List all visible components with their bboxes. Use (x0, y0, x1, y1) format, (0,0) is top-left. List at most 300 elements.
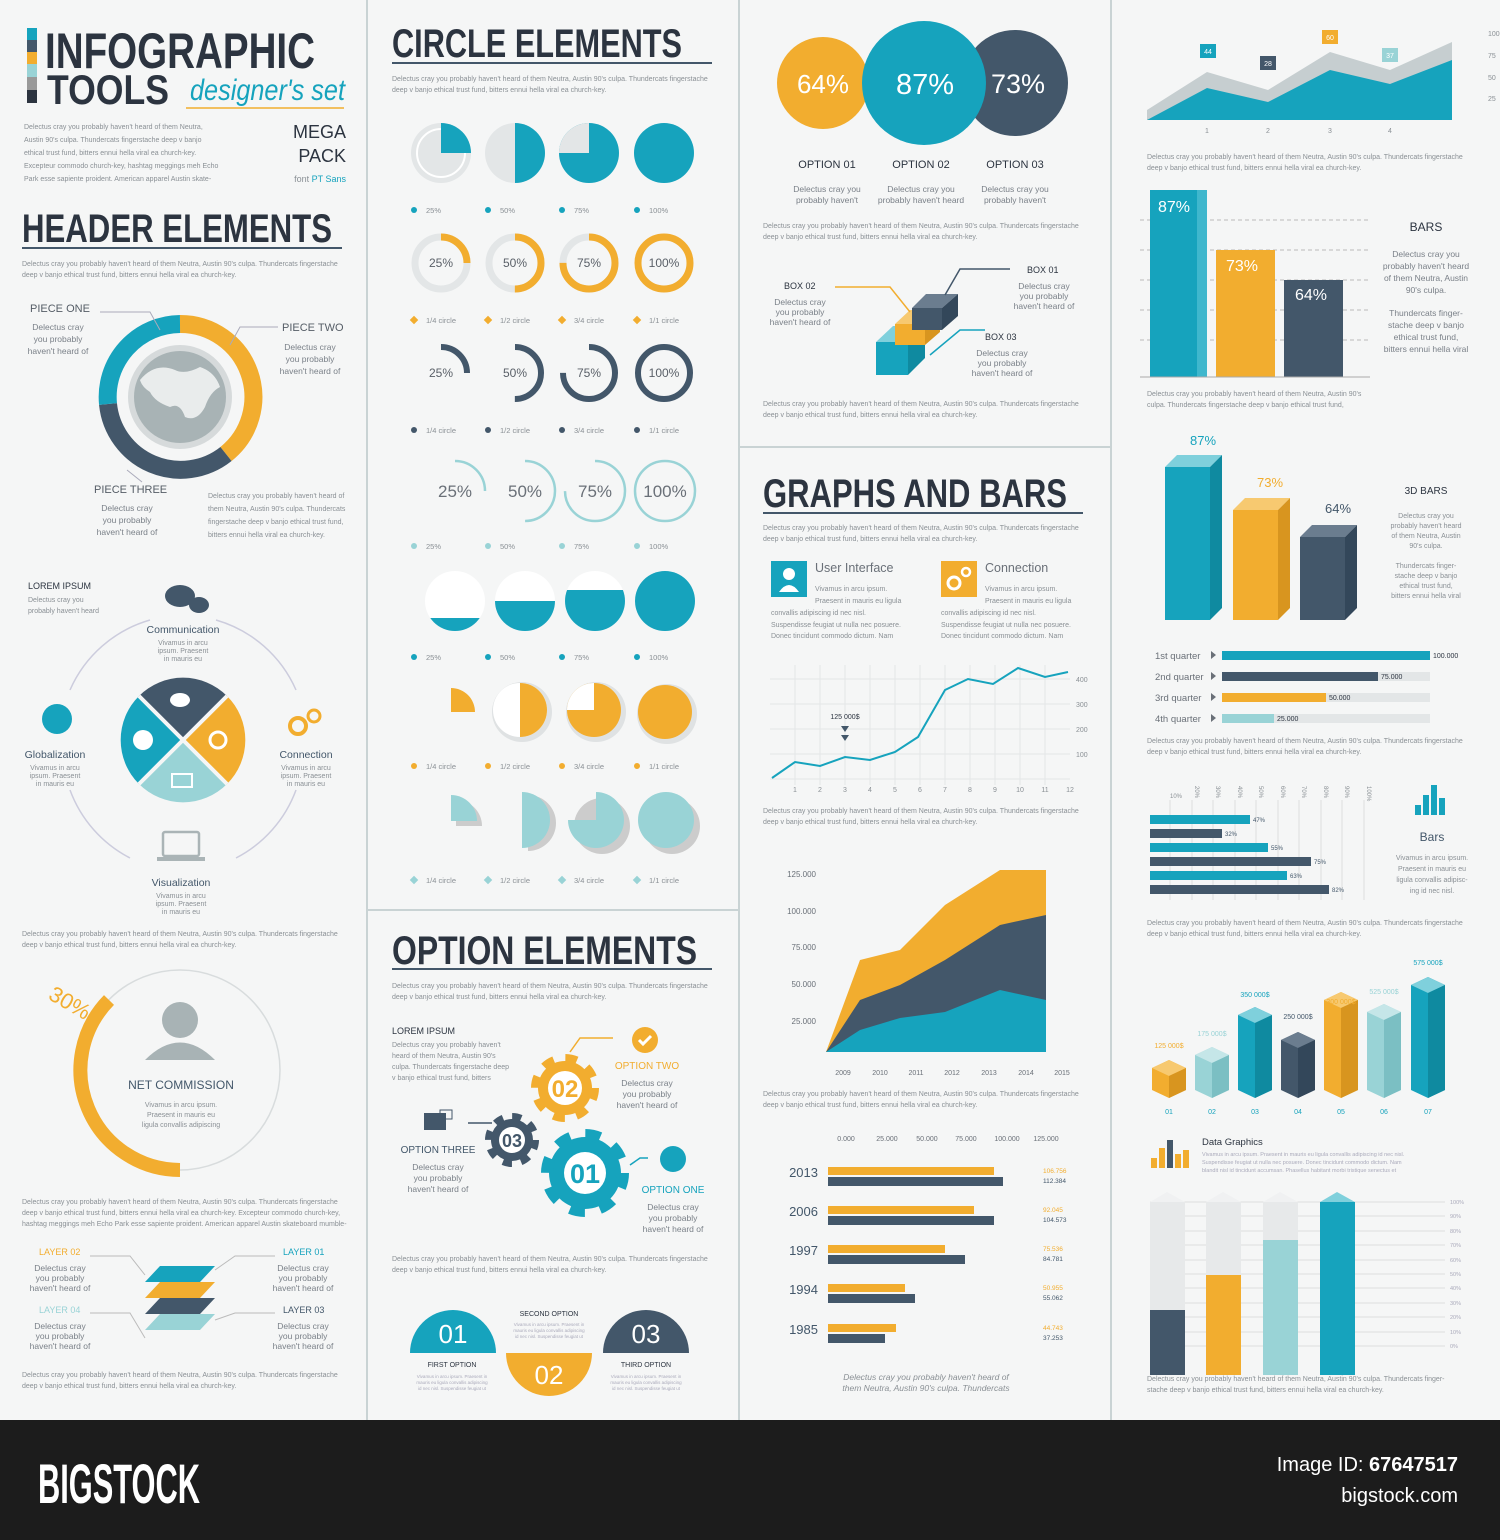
3d bars: 90's culpa. (1409, 543, 1443, 550)
area chart: Delectus cray you probably haven't heard of them Neutra, Austin 90's culpa. Thundercats fingerstache (763, 1091, 1079, 1098)
donut with globe: fingerstache deep v banjo ethical trust fund, (208, 519, 343, 526)
legend row 3: 1/2 circle (500, 426, 530, 435)
3d columns chart: 07 (1424, 1109, 1432, 1116)
bar chart: stache deep v banjo (1388, 320, 1464, 330)
three overlapping circles: Delectus cray you probably haven't heard of them Neutra, Austin 90's culpa. Thundercats fingerstache (763, 223, 1079, 230)
3d boxes: BOX 02 (784, 281, 816, 291)
3d bars: 87% (1190, 433, 1216, 448)
top right area chart: 4 (1388, 128, 1392, 135)
quad circle diagram: Delectus cray you probably haven't heard of them Neutra, Austin 90's culpa. Thundercats fingerstache (22, 931, 338, 938)
donut with globe: bitters ennui hella viral ea church-key. (208, 532, 325, 539)
donut with globe: Delectus cray (32, 322, 84, 332)
quarter progress bars: 4th quarter (1155, 714, 1201, 725)
heading: circle elements (392, 22, 712, 94)
bar chart: culpa. Thundercats fingerstache deep v banjo ethical trust fund, (1147, 402, 1344, 409)
data graphics columns: Delectus cray you probably haven't heard of them Neutra, Austin 90's culpa. Thundercats finger- (1147, 1376, 1445, 1383)
3d bars: Delectus cray you (1398, 513, 1454, 520)
area chart: 2013 (981, 1070, 997, 1077)
area chart: 2010 (872, 1070, 888, 1077)
line chart: 6 (918, 787, 922, 794)
layers: LAYER 01 (283, 1247, 324, 1257)
bar chart: probably haven't heard (1383, 261, 1469, 271)
quad circle diagram: Connection (279, 749, 333, 761)
percent bars: 55% (1271, 846, 1284, 852)
line chart: 1 (793, 787, 797, 794)
legend row 5: 100% (649, 653, 669, 662)
layers: you probably (36, 1331, 85, 1341)
3d columns chart: 250 000$ (1283, 1014, 1313, 1021)
donut with globe: Delectus cray (284, 342, 336, 352)
title block: designer's set (190, 74, 346, 107)
top right area chart: 50 (1488, 75, 1496, 82)
quarter progress bars: 3rd quarter (1155, 693, 1201, 704)
icon blocks: convallis adipiscing id nec nisl. (941, 610, 1036, 617)
top right area chart (1147, 30, 1500, 172)
horizontal year bars: 25.000 (876, 1136, 898, 1143)
3d boxes: Delectus cray (976, 348, 1028, 358)
circle row 2: orange rings: 75% (577, 256, 601, 270)
area chart: 125.000 (787, 870, 817, 879)
heading: header elements: deep v banjo ethical trust fund, bitters ennui hella viral ea church-key. (22, 272, 236, 279)
top right area chart: 3 (1328, 128, 1332, 135)
quad circle diagram: in mauris eu (164, 656, 202, 663)
data graphics columns: 30% (1450, 1301, 1461, 1307)
legend row 6: 1/1 circle (649, 762, 679, 771)
circle row 4: thin rings: 100% (643, 482, 687, 501)
three overlapping circles: Delectus cray you (887, 184, 955, 194)
icon blocks: Suspendisse feugiat ut nulla nec posuere. (941, 622, 1071, 629)
circle row 1: pies (411, 123, 694, 183)
legend row 7: 1/4 circle (426, 876, 456, 885)
title block: PACK (298, 146, 346, 166)
gears diagram: heard of them Neutra, Austin 90's (392, 1053, 496, 1060)
quad circle diagram: in mauris eu (36, 781, 74, 788)
quad circle diagram: Delectus cray you (28, 597, 84, 604)
3d columns chart: 125 000$ (1154, 1043, 1184, 1050)
line chart: 2 (818, 787, 822, 794)
title block: ethical trust fund, bitters ennui hella viral ea church-key. (24, 150, 196, 157)
semicircle options: Vivamus in arcu ipsum. Praesent in (611, 1374, 682, 1379)
heading: header elements: Delectus cray you probably haven't heard of them Neutra, Austin 90's culpa. Thundercats fingerstache (22, 261, 338, 268)
data graphics columns: 90% (1450, 1214, 1461, 1220)
icon blocks: Vivamus in arcu ipsum. (815, 586, 887, 593)
data graphics columns: stache deep v banjo ethical trust fund, bitters ennui hella viral ea church-key. (1147, 1387, 1384, 1394)
circle row 4: thin rings (425, 461, 695, 521)
percent bars: Vivamus in arcu ipsum. (1396, 855, 1468, 862)
line chart: 200 (1076, 727, 1088, 734)
bar chart: 73% (1226, 258, 1258, 275)
net commission: 30% (45, 981, 95, 1025)
semicircle options: THIRD OPTION (621, 1362, 671, 1369)
quarter progress bars: 100.000 (1433, 653, 1458, 660)
data graphics columns: 70% (1450, 1243, 1461, 1249)
area chart: 100.000 (787, 907, 817, 916)
quad circle diagram: Communication (147, 624, 220, 636)
donut with globe: haven't heard of (97, 527, 158, 537)
legend row 7 (410, 876, 679, 885)
gears diagram: OPTION TWO (615, 1061, 679, 1072)
percent bars: 40% (1236, 786, 1242, 799)
horizontal year bars: 0.000 (837, 1136, 855, 1143)
horizontal year bars: them Neutra, Austin 90's culpa. Thundercats (842, 1383, 1010, 1393)
percent bars: 70% (1300, 786, 1306, 799)
semicircle options: Vivamus in arcu ipsum. Praesent in (417, 1374, 488, 1379)
line chart: 400 (1076, 677, 1088, 684)
gears diagram: haven't heard of (643, 1224, 704, 1234)
3d boxes: haven't heard of (770, 317, 831, 327)
donut with globe: you probably (103, 515, 152, 525)
circle row 3: dark rings: 25% (429, 366, 453, 380)
line chart: 4 (868, 787, 872, 794)
semicircle options: SECOND OPTION (520, 1311, 578, 1318)
layers: haven't heard of (273, 1341, 334, 1351)
legend row 1 (411, 206, 669, 215)
icon blocks: Vivamus in arcu ipsum. (985, 586, 1057, 593)
bar chart: Thundercats finger- (1389, 308, 1463, 318)
circle row 3: dark rings: 100% (649, 366, 680, 380)
heading: option elements: OPTION ELEMENTS (392, 929, 697, 973)
layers: you probably (36, 1273, 85, 1283)
three overlapping circles: 73% (991, 69, 1045, 99)
circle row 2: orange rings: 50% (503, 256, 527, 270)
quad circle diagram: Globalization (25, 749, 86, 761)
area chart: 2014 (1018, 1070, 1034, 1077)
data graphics columns: 20% (1450, 1315, 1461, 1321)
3d boxes: haven't heard of (1014, 301, 1075, 311)
icon blocks: User Interface (815, 561, 894, 575)
horizontal year bars: 75.000 (955, 1136, 977, 1143)
gears diagram: Delectus cray you probably haven't (392, 1042, 501, 1049)
3d bars: probably haven't heard (1390, 523, 1462, 530)
3d boxes: you probably (978, 358, 1027, 368)
layers (22, 1247, 338, 1390)
quarter progress bars: 25.000 (1277, 716, 1299, 723)
3d boxes (763, 265, 1079, 419)
legend row 6: 3/4 circle (574, 762, 604, 771)
bar chart: ethical trust fund, (1394, 332, 1458, 342)
layers: Delectus cray (34, 1321, 86, 1331)
footer bar: BIGSTOCK (38, 1452, 200, 1515)
legend row 1: 75% (574, 206, 589, 215)
line chart: 10 (1016, 787, 1024, 794)
line chart (763, 665, 1088, 826)
horizontal year bars (789, 1136, 1067, 1393)
horizontal year bars: 2006 (789, 1204, 818, 1219)
data graphics columns: 40% (1450, 1286, 1461, 1292)
heading: option elements: Delectus cray you probably haven't heard of them Neutra, Austin 90's culpa. Thundercats fingerstache (392, 983, 708, 990)
legend row 6: 1/4 circle (426, 762, 456, 771)
legend row 4: 50% (500, 542, 515, 551)
quad circle diagram: ipsum. Praesent (158, 648, 208, 655)
area chart: 50.000 (792, 980, 817, 989)
horizontal year bars: 75.536 (1043, 1246, 1063, 1253)
circle row 4: thin rings: 75% (578, 482, 612, 501)
top right area chart: 1 (1205, 128, 1209, 135)
horizontal year bars: 50.955 (1043, 1285, 1063, 1292)
3d columns chart: 575 000$ (1413, 960, 1443, 967)
top right area chart: Delectus cray you probably haven't heard of them Neutra, Austin 90's culpa. Thundercats fingerstache (1147, 154, 1463, 161)
quarter progress bars (1147, 651, 1463, 756)
legend row 7: 3/4 circle (574, 876, 604, 885)
semicircle options: id nec nisl. Suspendisse feugiat ut (515, 1334, 584, 1339)
gears diagram: haven't heard of (408, 1184, 469, 1194)
top right area chart: 100 (1488, 31, 1500, 38)
title block (24, 23, 346, 184)
data graphics columns: 10% (1450, 1330, 1461, 1336)
icon blocks: Praesent in mauris eu ligula (985, 598, 1071, 605)
quad circle diagram: probably haven't heard (28, 608, 99, 615)
semicircle options: 01 (439, 1319, 467, 1349)
data graphics columns: 100% (1450, 1200, 1464, 1206)
top right area chart: 28 (1264, 61, 1272, 68)
layers: Delectus cray (277, 1321, 329, 1331)
layers: LAYER 03 (283, 1305, 324, 1315)
gears diagram: Delectus cray (621, 1078, 673, 1088)
quad circle diagram: deep v banjo ethical trust fund, bitters ennui hella viral ea church-key. (22, 942, 236, 949)
donut with globe (28, 303, 346, 539)
gear 01: 01 (570, 1159, 600, 1189)
heading: graphs and bars: GRAPHS AND BARS (763, 472, 1067, 516)
semicircle options: mauris eu ligula convallis adipiscing (610, 1380, 682, 1385)
circle row 2: orange rings: 100% (649, 256, 680, 270)
gears diagram: v banjo ethical trust fund, bitters (392, 1075, 491, 1082)
quad circle diagram: ipsum. Praesent (281, 773, 331, 780)
percent bars (1147, 785, 1468, 938)
area chart: 2009 (835, 1070, 851, 1077)
bar chart: 90's culpa. (1406, 285, 1446, 295)
legend row 5 (411, 653, 669, 662)
heading: circle elements: CIRCLE ELEMENTS (392, 22, 682, 66)
gears diagram: Delectus cray (647, 1202, 699, 1212)
gears diagram: Delectus cray (412, 1162, 464, 1172)
net commission (22, 970, 347, 1228)
heading: header elements: HEADER ELEMENTS (22, 207, 332, 251)
icon blocks (771, 561, 1071, 640)
three overlapping circles: Delectus cray you (793, 184, 861, 194)
heading: header elements (22, 207, 342, 279)
layers: Delectus cray you probably haven't heard of them Neutra, Austin 90's culpa. Thundercats fingerstache (22, 1372, 338, 1379)
legend row 7: 1/1 circle (649, 876, 679, 885)
area chart: 2012 (944, 1070, 960, 1077)
3d bars: Thundercats finger- (1396, 563, 1457, 570)
quarter progress bars: 2nd quarter (1155, 672, 1204, 683)
gears diagram: Delectus cray you probably haven't heard of them Neutra, Austin 90's culpa. Thundercats fingerstache (392, 1256, 708, 1263)
line chart: 9 (993, 787, 997, 794)
3d boxes: deep v banjo ethical trust fund, bitters ennui hella viral ea church-key. (763, 412, 977, 419)
horizontal year bars: 1985 (789, 1322, 818, 1337)
3d bars: of them Neutra, Austin (1391, 533, 1461, 540)
data graphics columns: Vivamus in arcu ipsum. Praesent in mauris eu ligula convallis adipiscing id nec nisl. (1202, 1152, 1405, 1158)
circle row 4: thin rings: 50% (508, 482, 542, 501)
semicircle options: mauris eu ligula convallis adipiscing (513, 1328, 585, 1333)
title block: Austin 90's culpa. Thundercats fingerstache deep v banjo (24, 137, 202, 144)
horizontal year bars: 1994 (789, 1282, 818, 1297)
top right area chart: 75 (1488, 53, 1496, 60)
data graphics columns: 50% (1450, 1272, 1461, 1278)
line chart: 100 (1076, 752, 1088, 759)
title block: Delectus cray you probably haven't heard of them Neutra, (24, 124, 203, 131)
legend row 6 (411, 762, 679, 771)
gears diagram: you probably (414, 1173, 463, 1183)
bar chart: Delectus cray you probably haven't heard of them Neutra, Austin 90's (1147, 391, 1362, 398)
gears diagram (392, 1026, 708, 1274)
legend row 3: 3/4 circle (574, 426, 604, 435)
quarter progress bars: 1st quarter (1155, 651, 1200, 662)
icon blocks: Donec tincidunt commodo dictum. Nam (771, 633, 893, 640)
legend row 2: 1/2 circle (500, 316, 530, 325)
percent bars: ligula convallis adipisc- (1396, 877, 1468, 884)
quad circle diagram: Vivamus in arcu (158, 640, 208, 647)
donut with globe: PIECE ONE (30, 303, 90, 315)
top right area chart: 44 (1204, 49, 1212, 56)
legend row 5: 25% (426, 653, 441, 662)
legend row 2: 1/1 circle (649, 316, 679, 325)
legend row 1: 25% (426, 206, 441, 215)
icon: colour bars (27, 28, 37, 103)
horizontal year bars: 1997 (789, 1243, 818, 1258)
semicircle options: id nec nisl. Suspendisse feugiat ut (418, 1386, 487, 1391)
circle row 2: orange rings (415, 237, 690, 289)
title block: MEGA (293, 122, 346, 142)
footer bar: bigstock.com (1341, 1485, 1458, 1507)
quad circle diagram (22, 581, 338, 949)
layers: you probably (279, 1273, 328, 1283)
gears diagram: culpa. Thundercats fingerstache deep (392, 1064, 509, 1071)
semicircle options: FIRST OPTION (428, 1362, 476, 1369)
legend row 4 (411, 542, 669, 551)
footer bar (0, 1420, 1500, 1540)
percent bars: 80% (1322, 786, 1328, 799)
title block: Park esse sapiente proident. American apparel Austin skate- (24, 176, 212, 183)
circle row 4: thin rings: 25% (438, 482, 472, 501)
legend row 4: 75% (574, 542, 589, 551)
percent bars: Bars (1420, 830, 1444, 844)
horizontal year bars: 37.253 (1043, 1335, 1063, 1342)
circle row 3: dark rings: 75% (577, 366, 601, 380)
three overlapping circles: deep v banjo ethical trust fund, bitters ennui hella viral ea church-key. (763, 234, 977, 241)
line chart: 3 (843, 787, 847, 794)
layers: Delectus cray (34, 1263, 86, 1273)
layers: haven't heard of (30, 1283, 91, 1293)
circle row 2: orange rings: 25% (429, 256, 453, 270)
semicircle options: Vivamus in arcu ipsum. Praesent in (514, 1322, 585, 1327)
3d bars: stache deep v banjo (1395, 573, 1457, 580)
net commission: Delectus cray you probably haven't heard of them Neutra, Austin 90's culpa. Thundercats fingerstache (22, 1199, 338, 1206)
percent bars: Delectus cray you probably haven't heard of them Neutra, Austin 90's culpa. Thundercats fingerstache (1147, 920, 1463, 927)
quarter progress bars: Delectus cray you probably haven't heard of them Neutra, Austin 90's culpa. Thundercats fingerstache (1147, 738, 1463, 745)
line chart: 7 (943, 787, 947, 794)
3d columns chart: 03 (1251, 1109, 1259, 1116)
title block: font PT Sans (294, 174, 346, 184)
three overlapping circles: 64% (797, 69, 849, 99)
donut with globe: haven't heard of (28, 346, 89, 356)
gear 03: 03 (502, 1131, 522, 1151)
data graphics columns: 60% (1450, 1258, 1461, 1264)
3d columns chart: 02 (1208, 1109, 1216, 1116)
legend row 1: 50% (500, 206, 515, 215)
legend row 2 (410, 316, 679, 325)
three overlapping circles: probably haven't (796, 195, 859, 205)
gears diagram: haven't heard of (617, 1100, 678, 1110)
quad circle diagram: Visualization (152, 877, 211, 889)
3d boxes: Delectus cray (1018, 281, 1070, 291)
quarter progress bars: 50.000 (1329, 695, 1351, 702)
data graphics columns: 0% (1450, 1344, 1458, 1350)
percent bars: 50% (1257, 786, 1263, 799)
layers: LAYER 04 (39, 1305, 80, 1315)
donut with globe: haven't heard of (280, 366, 341, 376)
percent bars: 60% (1279, 786, 1285, 799)
net commission: Vivamus in arcu ipsum. (145, 1102, 217, 1109)
quad circle diagram: ipsum. Praesent (30, 773, 80, 780)
bar chart: Delectus cray you (1392, 249, 1460, 259)
quad circle diagram: Vivamus in arcu (281, 765, 331, 772)
3d boxes: haven't heard of (972, 368, 1033, 378)
gear 01 (547, 1135, 623, 1211)
gear 02 (536, 1059, 594, 1117)
3d columns chart: 06 (1380, 1109, 1388, 1116)
percent bars: 20% (1193, 786, 1199, 799)
heading: option elements (392, 929, 712, 1001)
gears diagram: OPTION THREE (401, 1145, 476, 1156)
percent bars: 30% (1214, 786, 1220, 799)
legend row 1: 100% (649, 206, 669, 215)
horizontal year bars: 50.000 (916, 1136, 938, 1143)
legend row 4: 100% (649, 542, 669, 551)
legend row 5: 50% (500, 653, 515, 662)
semicircle options: id nec nisl. Suspendisse feugiat ut (612, 1386, 681, 1391)
horizontal year bars: 84.781 (1043, 1256, 1063, 1263)
donut with globe: Delectus cray (101, 503, 153, 513)
gears diagram: you probably (649, 1213, 698, 1223)
percent bars: 10% (1170, 794, 1183, 800)
line chart: 300 (1076, 702, 1088, 709)
3d boxes: BOX 03 (985, 332, 1017, 342)
percent bars: 82% (1332, 888, 1345, 894)
three overlapping circles: probably haven't heard (878, 195, 964, 205)
gears diagram: you probably (623, 1089, 672, 1099)
three overlapping circles: Delectus cray you (981, 184, 1049, 194)
icon blocks: Connection (985, 561, 1048, 575)
semicircle options: 03 (632, 1319, 660, 1349)
heading: graphs and bars: Delectus cray you probably haven't heard of them Neutra, Austin 90's culpa. Thundercats fingerstache (763, 525, 1079, 532)
donut with globe: you probably (286, 354, 335, 364)
line chart: 11 (1041, 787, 1049, 794)
line chart: 12 (1066, 787, 1074, 794)
data graphics columns: Suspendisse feugiat ut nulla nec posuere. Donec tincidunt commodo dictum. Nam (1202, 1160, 1402, 1166)
three overlapping circles: OPTION 02 (892, 159, 950, 171)
bar chart: bitters ennui hella viral (1384, 344, 1468, 354)
bar chart (1140, 190, 1469, 409)
3d columns chart: 01 (1165, 1109, 1173, 1116)
3d boxes: you probably (1020, 291, 1069, 301)
3d boxes: you probably (776, 307, 825, 317)
line chart: 5 (893, 787, 897, 794)
circle row 3: dark rings (415, 347, 690, 399)
horizontal year bars: 2013 (789, 1165, 818, 1180)
percent bars: 75% (1314, 860, 1327, 866)
quad circle diagram: Vivamus in arcu (156, 893, 206, 900)
horizontal year bars: 44.743 (1043, 1325, 1063, 1332)
circle row 6: orange pies (451, 682, 697, 744)
icon blocks: Donec tincidunt commodo dictum. Nam (941, 633, 1063, 640)
percent bars: 63% (1290, 874, 1303, 880)
area chart: 25.000 (792, 1017, 817, 1026)
layers: you probably (279, 1331, 328, 1341)
heading: option elements: deep v banjo ethical trust fund, bitters ennui hella viral ea church-key. (392, 994, 606, 1001)
icon blocks: Suspendisse feugiat ut nulla nec posuere. (771, 622, 901, 629)
bar chart: 64% (1295, 287, 1327, 304)
